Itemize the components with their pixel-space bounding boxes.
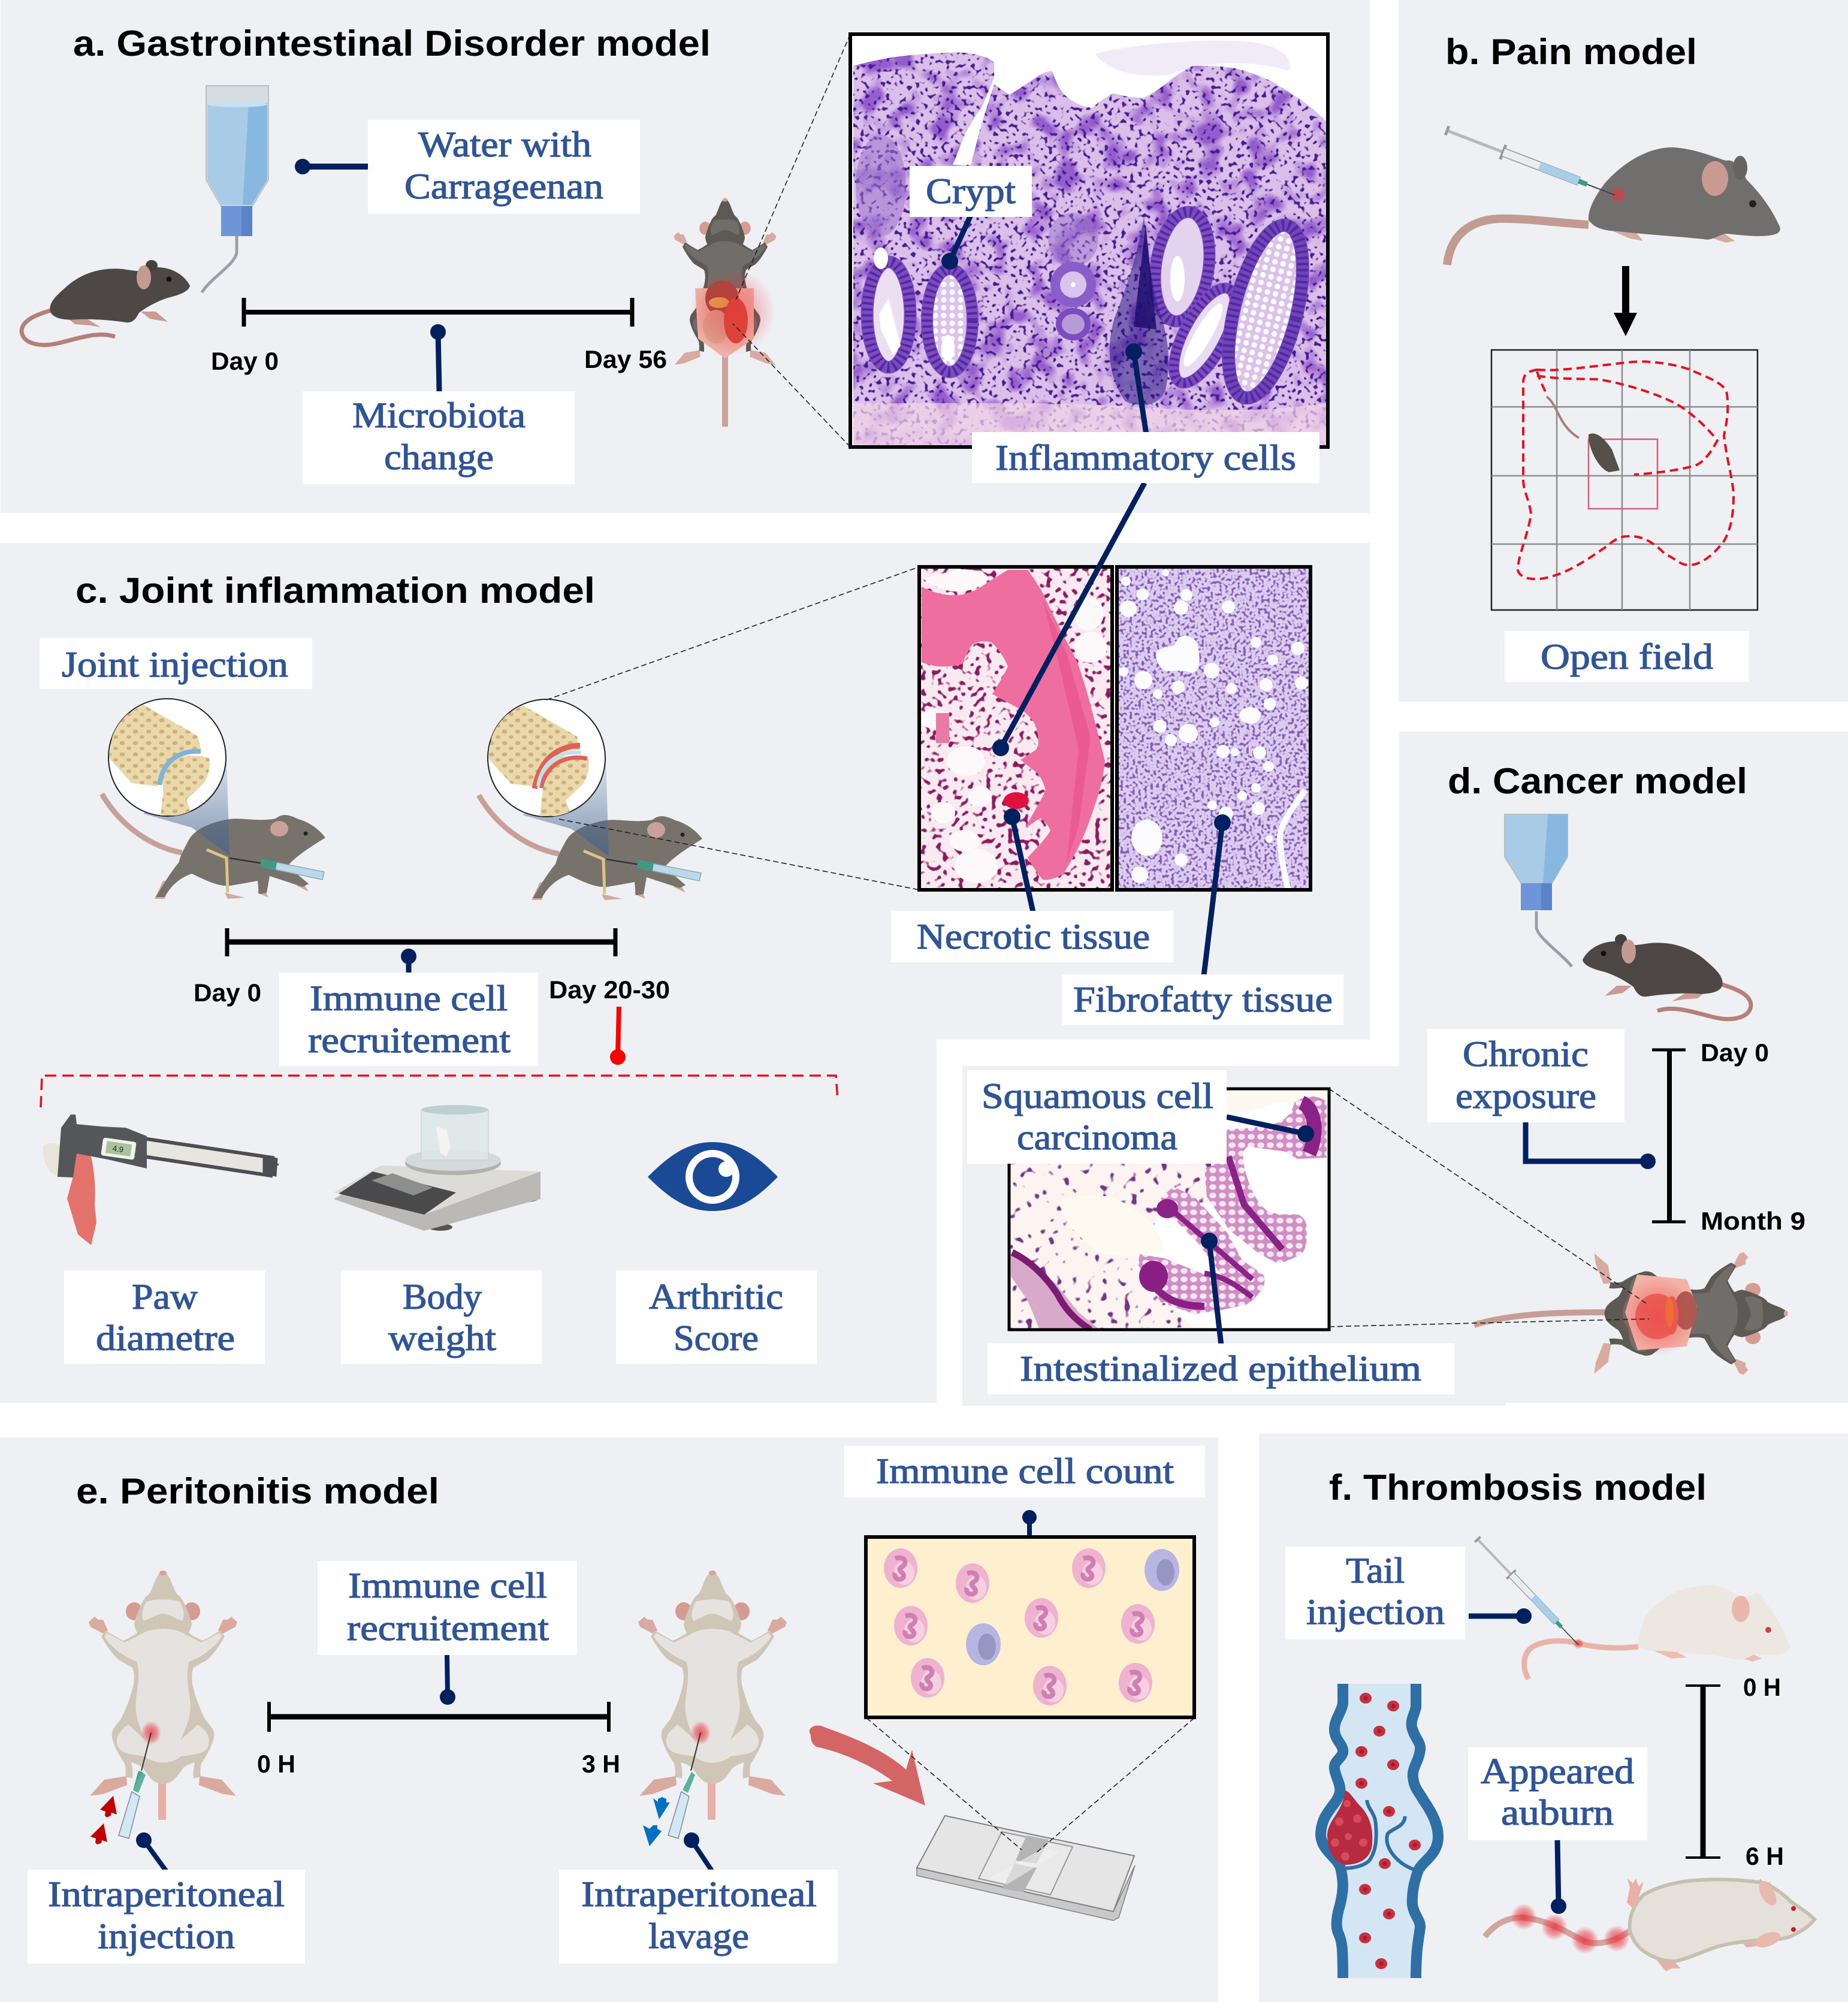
pin: red readout marker	[610, 1007, 626, 1065]
label: tail injection: Tail	[1346, 1551, 1405, 1590]
label: fibrofatty tissue: Fibrofatty tissue	[1073, 980, 1333, 1019]
icon: red arrows up	[90, 1796, 117, 1844]
label: microbiota change: Microbiota	[352, 395, 526, 435]
label: water with carrageenan: Carrageenan	[404, 167, 603, 206]
label: paw diametre	[64, 1270, 265, 1364]
pin: water label connector	[295, 159, 369, 174]
label: appeared auburn: Appeared	[1481, 1752, 1634, 1791]
timeline: day 0 to day 20-30: Day 20-30	[549, 976, 670, 1004]
label: body weight	[341, 1270, 542, 1364]
label: intraperitoneal injection	[28, 1870, 305, 1964]
label: immune cell recruitement	[279, 973, 538, 1066]
timeline: 0 H to 3 H: 0 H	[257, 1750, 295, 1778]
zoom lines: cancer	[1329, 1089, 1649, 1327]
label: squamous cell carcinoma	[967, 1070, 1227, 1164]
timeline: day 0 to day 56	[211, 298, 667, 375]
heading: f: f. Thrombosis model	[1329, 1467, 1707, 1508]
label: appeared auburn: auburn	[1501, 1793, 1614, 1832]
icon: walking mouse day 0 with healthy joint	[102, 699, 325, 899]
label: body weight: weight	[388, 1318, 496, 1358]
label: fibrofatty tissue	[1062, 974, 1343, 1025]
timeline: 0 H to 6 H: 0 H	[1743, 1673, 1781, 1701]
icon: gray mouse with syringe	[1444, 123, 1780, 265]
label: intraperitoneal lavage	[559, 1870, 838, 1964]
icon: balance with jar	[334, 1105, 540, 1231]
label: crypt with pin: Crypt	[926, 171, 1016, 211]
pin: tail injection	[1469, 1608, 1532, 1624]
label: immune cell count	[844, 1446, 1205, 1497]
heading: d: d. Cancer model	[1448, 761, 1747, 801]
label: arthritic score: Arthritic	[649, 1277, 783, 1316]
label: body weight: Body	[403, 1277, 482, 1316]
panel: f. Thrombosis model	[1259, 1433, 1848, 2002]
icon: water bottle	[202, 86, 268, 292]
label: immune cell recruitement: recruitement	[308, 1020, 511, 1060]
icon: black mouse	[1583, 934, 1751, 1019]
pin: cell count	[1022, 1510, 1037, 1537]
pin: injection	[136, 1832, 166, 1871]
histology: necrotic bone	[919, 567, 1112, 890]
panel: c. Joint inflammation model	[0, 543, 1370, 1403]
bracket: red dashed readouts	[41, 1076, 838, 1107]
label: chronic exposure: exposure	[1456, 1076, 1596, 1116]
icon: dissected mouse dorsal view	[674, 198, 777, 427]
label: inflammatory cells	[972, 432, 1319, 483]
histology: squamous carcinoma	[1009, 1089, 1329, 1330]
timeline: 0 H to 6 H: 6 H	[1746, 1842, 1784, 1870]
panel: a. Gastrointestinal Disorder model	[1, 0, 1370, 513]
timeline: day 0 to month 9	[1652, 1038, 1805, 1235]
label: immune cell recruitement: Immune cell	[310, 979, 508, 1018]
timeline: 0 H to 6 H	[1686, 1673, 1784, 1870]
label: intestinalized epithelium	[988, 1343, 1454, 1394]
chart: immune cell count field	[866, 1537, 1194, 1717]
panel: d. Cancer model	[962, 732, 1848, 1406]
zoom lines: gastrointestinal	[733, 34, 850, 447]
label: joint injection: Joint injection	[62, 645, 288, 684]
pin: necrotic tissue	[1004, 808, 1033, 912]
label: water with carrageenan	[368, 120, 640, 214]
label: squamous cell carcinoma: carcinoma	[1017, 1118, 1177, 1157]
heading: a: a. Gastrointestinal Disorder model	[73, 23, 711, 64]
icon: rat with red tail	[1485, 1879, 1814, 1971]
icon: white mouse with tail syringe	[1473, 1535, 1790, 1679]
pin: appeared auburn	[1551, 1840, 1566, 1914]
label: appeared auburn	[1468, 1747, 1647, 1840]
icon: blood vessel with thrombus	[1321, 1684, 1438, 1978]
label: intraperitoneal injection: injection	[98, 1916, 235, 1956]
pin: microbiota connector	[430, 324, 446, 391]
connector: inflammatory cells to bone marrow	[992, 483, 1145, 756]
label: joint injection	[40, 638, 312, 689]
pin: recruitment	[440, 1655, 455, 1705]
heading: c: c. Joint inflammation model	[76, 570, 595, 611]
label: intraperitoneal lavage: Intraperitoneal	[581, 1874, 817, 1914]
icon: dissected mouse	[1474, 1252, 1788, 1375]
pin: lavage	[684, 1832, 712, 1871]
label: chronic exposure	[1427, 1029, 1624, 1122]
label: open field: Open field	[1541, 637, 1713, 677]
histology: fibrofatty tissue	[1117, 567, 1310, 890]
label: crypt with pin	[910, 166, 1032, 270]
label: intraperitoneal injection: Intraperitoneal	[48, 1874, 285, 1914]
heading: e: e. Peritonitis model	[76, 1471, 439, 1511]
pin: immune recruitment	[401, 949, 416, 973]
label: immune cell recruitement: recruitement	[347, 1608, 549, 1648]
chart: open field arena with track	[1491, 350, 1758, 610]
label: chronic exposure: Chronic	[1463, 1034, 1589, 1074]
timeline: day 0 to day 20-30	[194, 928, 670, 1007]
icon: eye	[648, 1142, 778, 1211]
label: tail injection: injection	[1306, 1592, 1445, 1632]
label: arthritic score	[616, 1270, 817, 1364]
pin: inflammatory cells upper	[1125, 343, 1146, 434]
label: tail injection	[1285, 1547, 1465, 1639]
icon: calipers measuring paw: 4.9	[112, 1144, 124, 1154]
arrow: red curved	[810, 1726, 925, 1805]
arrow: down to open field	[1614, 266, 1637, 336]
icon: white rat with injection	[89, 1571, 237, 1838]
icon: blue arrows down	[643, 1797, 670, 1846]
timeline: day 0 to month 9: Month 9	[1701, 1207, 1805, 1235]
label: immune cell recruitement: Immune cell	[348, 1566, 547, 1605]
panel: b. Pain model	[1399, 0, 1848, 702]
label: paw diametre: diametre	[96, 1318, 235, 1358]
label: squamous cell carcinoma: Squamous cell	[982, 1076, 1213, 1116]
timeline: 0 H to 3 H: 3 H	[582, 1750, 620, 1778]
label: water with carrageenan: Water with	[418, 125, 591, 164]
pin: squamous cell carcinoma	[1227, 1117, 1314, 1142]
timeline: day 0 to day 56: Day 56	[584, 345, 667, 373]
pin: fibrofatty tissue	[1204, 814, 1231, 976]
timeline: day 0 to day 56: Day 0	[211, 347, 279, 375]
label: necrotic tissue: Necrotic tissue	[917, 917, 1150, 956]
label: intraperitoneal lavage: lavage	[648, 1916, 749, 1956]
zoom lines: slide	[866, 1718, 1194, 1853]
label: open field	[1505, 631, 1749, 682]
pin: intestinalized epithelium	[1201, 1233, 1221, 1345]
label: microbiota change	[303, 391, 575, 484]
icon: walking mouse day 20-30 with inflamed joint	[479, 699, 702, 900]
label: intestinalized epithelium: Intestinalized epithelium	[1020, 1349, 1421, 1388]
pin: chronic exposure elbow	[1526, 1122, 1656, 1169]
icon: black mouse drinking	[22, 260, 190, 345]
label: immune cell recruitement	[318, 1561, 577, 1655]
timeline: day 0 to month 9: Day 0	[1701, 1038, 1769, 1067]
timeline: 0 H to 3 H	[257, 1702, 620, 1778]
icon: white rat with lavage	[638, 1571, 787, 1838]
histology: colon mucosa	[850, 34, 1328, 447]
label: inflammatory cells: Inflammatory cells	[995, 438, 1296, 478]
label: immune cell count: Immune cell count	[876, 1451, 1174, 1491]
icon: calipers measuring paw	[43, 1115, 279, 1245]
label: paw diametre: Paw	[132, 1277, 198, 1316]
icon: water bottle	[1505, 814, 1572, 967]
timeline: day 0 to day 20-30: Day 0	[194, 979, 261, 1007]
label: necrotic tissue	[891, 911, 1173, 962]
heading: b: b. Pain model	[1445, 32, 1697, 72]
icon: counting chamber slide	[917, 1816, 1135, 1921]
label: arthritic score: Score	[674, 1318, 759, 1358]
panel: e. Peritonitis model	[0, 1438, 1218, 2002]
zoom lines: joint	[546, 567, 919, 890]
label: microbiota change: change	[384, 437, 494, 477]
